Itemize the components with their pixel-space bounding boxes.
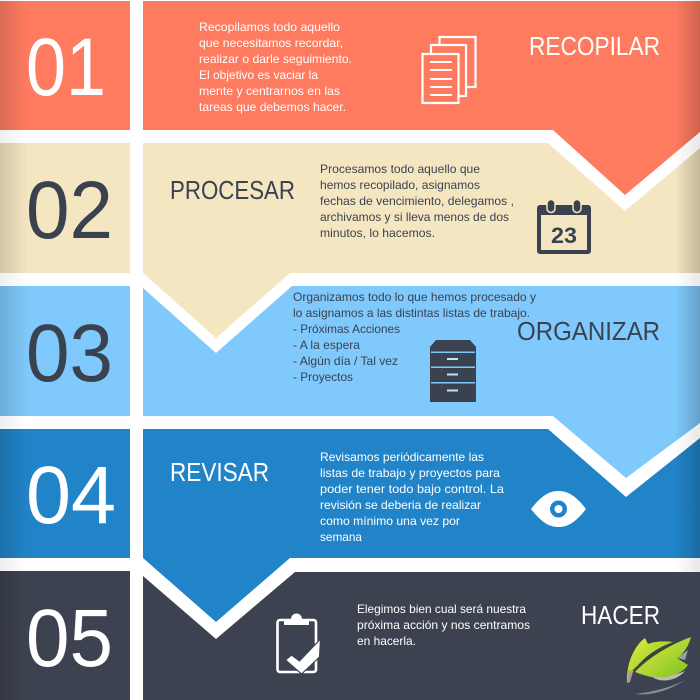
heading: recopilar: RECOPILAR xyxy=(529,31,660,61)
text: revisar description: semana xyxy=(320,530,362,544)
band: beige with arrows xyxy=(143,143,700,338)
panel: 01 recopilar xyxy=(0,1,700,195)
text: hacer description xyxy=(357,602,530,648)
icon: eye xyxy=(531,491,586,527)
icon: calendar xyxy=(537,200,591,254)
text: hacer description: Elegimos bien cual será nuestra xyxy=(357,602,526,616)
text: revisar description xyxy=(320,450,504,544)
text: revisar description: como mínimo una vez por xyxy=(320,514,460,528)
heading: organizar: ORGANIZAR xyxy=(517,316,660,346)
text: recopilar description: Recopilamos todo aquello xyxy=(199,20,340,34)
number block 03 xyxy=(0,286,130,416)
number block 05: 05 xyxy=(26,593,113,684)
text: procesar description: Procesamos todo aquello que xyxy=(320,162,480,176)
icon: filing cabinet xyxy=(430,340,476,402)
icon: green leaf logo xyxy=(627,637,691,694)
band: blue with arrows xyxy=(143,429,700,622)
number block 02 xyxy=(0,143,130,273)
band: dark with notch xyxy=(143,572,700,700)
number block 01 xyxy=(0,1,130,130)
text: procesar description: hemos recopilado, asignamos xyxy=(320,178,480,192)
text: recopilar description: mente y centrarnos en las xyxy=(199,84,340,98)
icon: documents xyxy=(422,37,476,103)
text: procesar description xyxy=(320,162,514,240)
text: organizar description xyxy=(293,290,536,384)
text: organizar description: - Próximas Acciones xyxy=(293,322,400,336)
text: organizar description: - Algún día / Tal vez xyxy=(293,354,398,368)
number block 02: 02 xyxy=(26,165,113,256)
panel: 02 procesar xyxy=(0,143,700,338)
text: recopilar description: tareas que debemos hacer. xyxy=(199,100,346,114)
text: procesar description: archivamos y si lleva menos de dos xyxy=(320,210,509,224)
text: organizar description: - Proyectos xyxy=(293,370,353,384)
number block 05 xyxy=(0,571,130,700)
number block 01: 01 xyxy=(26,22,106,113)
band: light blue with arrows xyxy=(143,286,700,478)
text: organizar description: Organizamos todo lo que hemos procesado y xyxy=(293,290,536,304)
heading: revisar: REVISAR xyxy=(170,457,269,487)
heading: hacer: HACER xyxy=(581,600,660,630)
text: hacer description: próxima acción y nos centramos xyxy=(357,618,530,632)
icon: calendar: 23 xyxy=(551,223,577,248)
text: revisar description: listas de trabajo y proyectos para xyxy=(320,466,500,480)
number block 04: 04 xyxy=(26,450,116,541)
panel: 05 hacer xyxy=(0,571,700,700)
text: recopilar description: El objetivo es vaciar la xyxy=(199,68,318,82)
text: recopilar description xyxy=(199,20,352,114)
text: procesar description: fechas de vencimiento, delegamos , xyxy=(320,194,514,208)
number block 03: 03 xyxy=(26,308,113,399)
icon: clipboard with check xyxy=(278,614,320,674)
text: organizar description: - A la espera xyxy=(293,338,360,352)
text: revisar description: revisión se deberia de realizar xyxy=(320,498,481,512)
text: procesar description: minutos, lo hacemos. xyxy=(320,226,435,240)
number block 04 xyxy=(0,429,130,558)
heading: procesar: PROCESAR xyxy=(170,175,295,205)
text: hacer description: en hacerla. xyxy=(357,634,416,648)
band: red with arrow xyxy=(143,1,700,195)
text: recopilar description: realizar o darle seguimiento. xyxy=(199,52,352,66)
text: revisar description: Revisamos periódicamente las xyxy=(320,450,484,464)
text: revisar description: poder tener todo bajo control. La xyxy=(320,482,504,496)
text: organizar description: lo asignamos a las distintas listas de trabajo. xyxy=(293,306,530,320)
panel: 03 organizar xyxy=(0,286,700,478)
panel: 04 revisar xyxy=(0,429,700,622)
text: recopilar description: que necesitamos recordar, xyxy=(199,36,343,50)
